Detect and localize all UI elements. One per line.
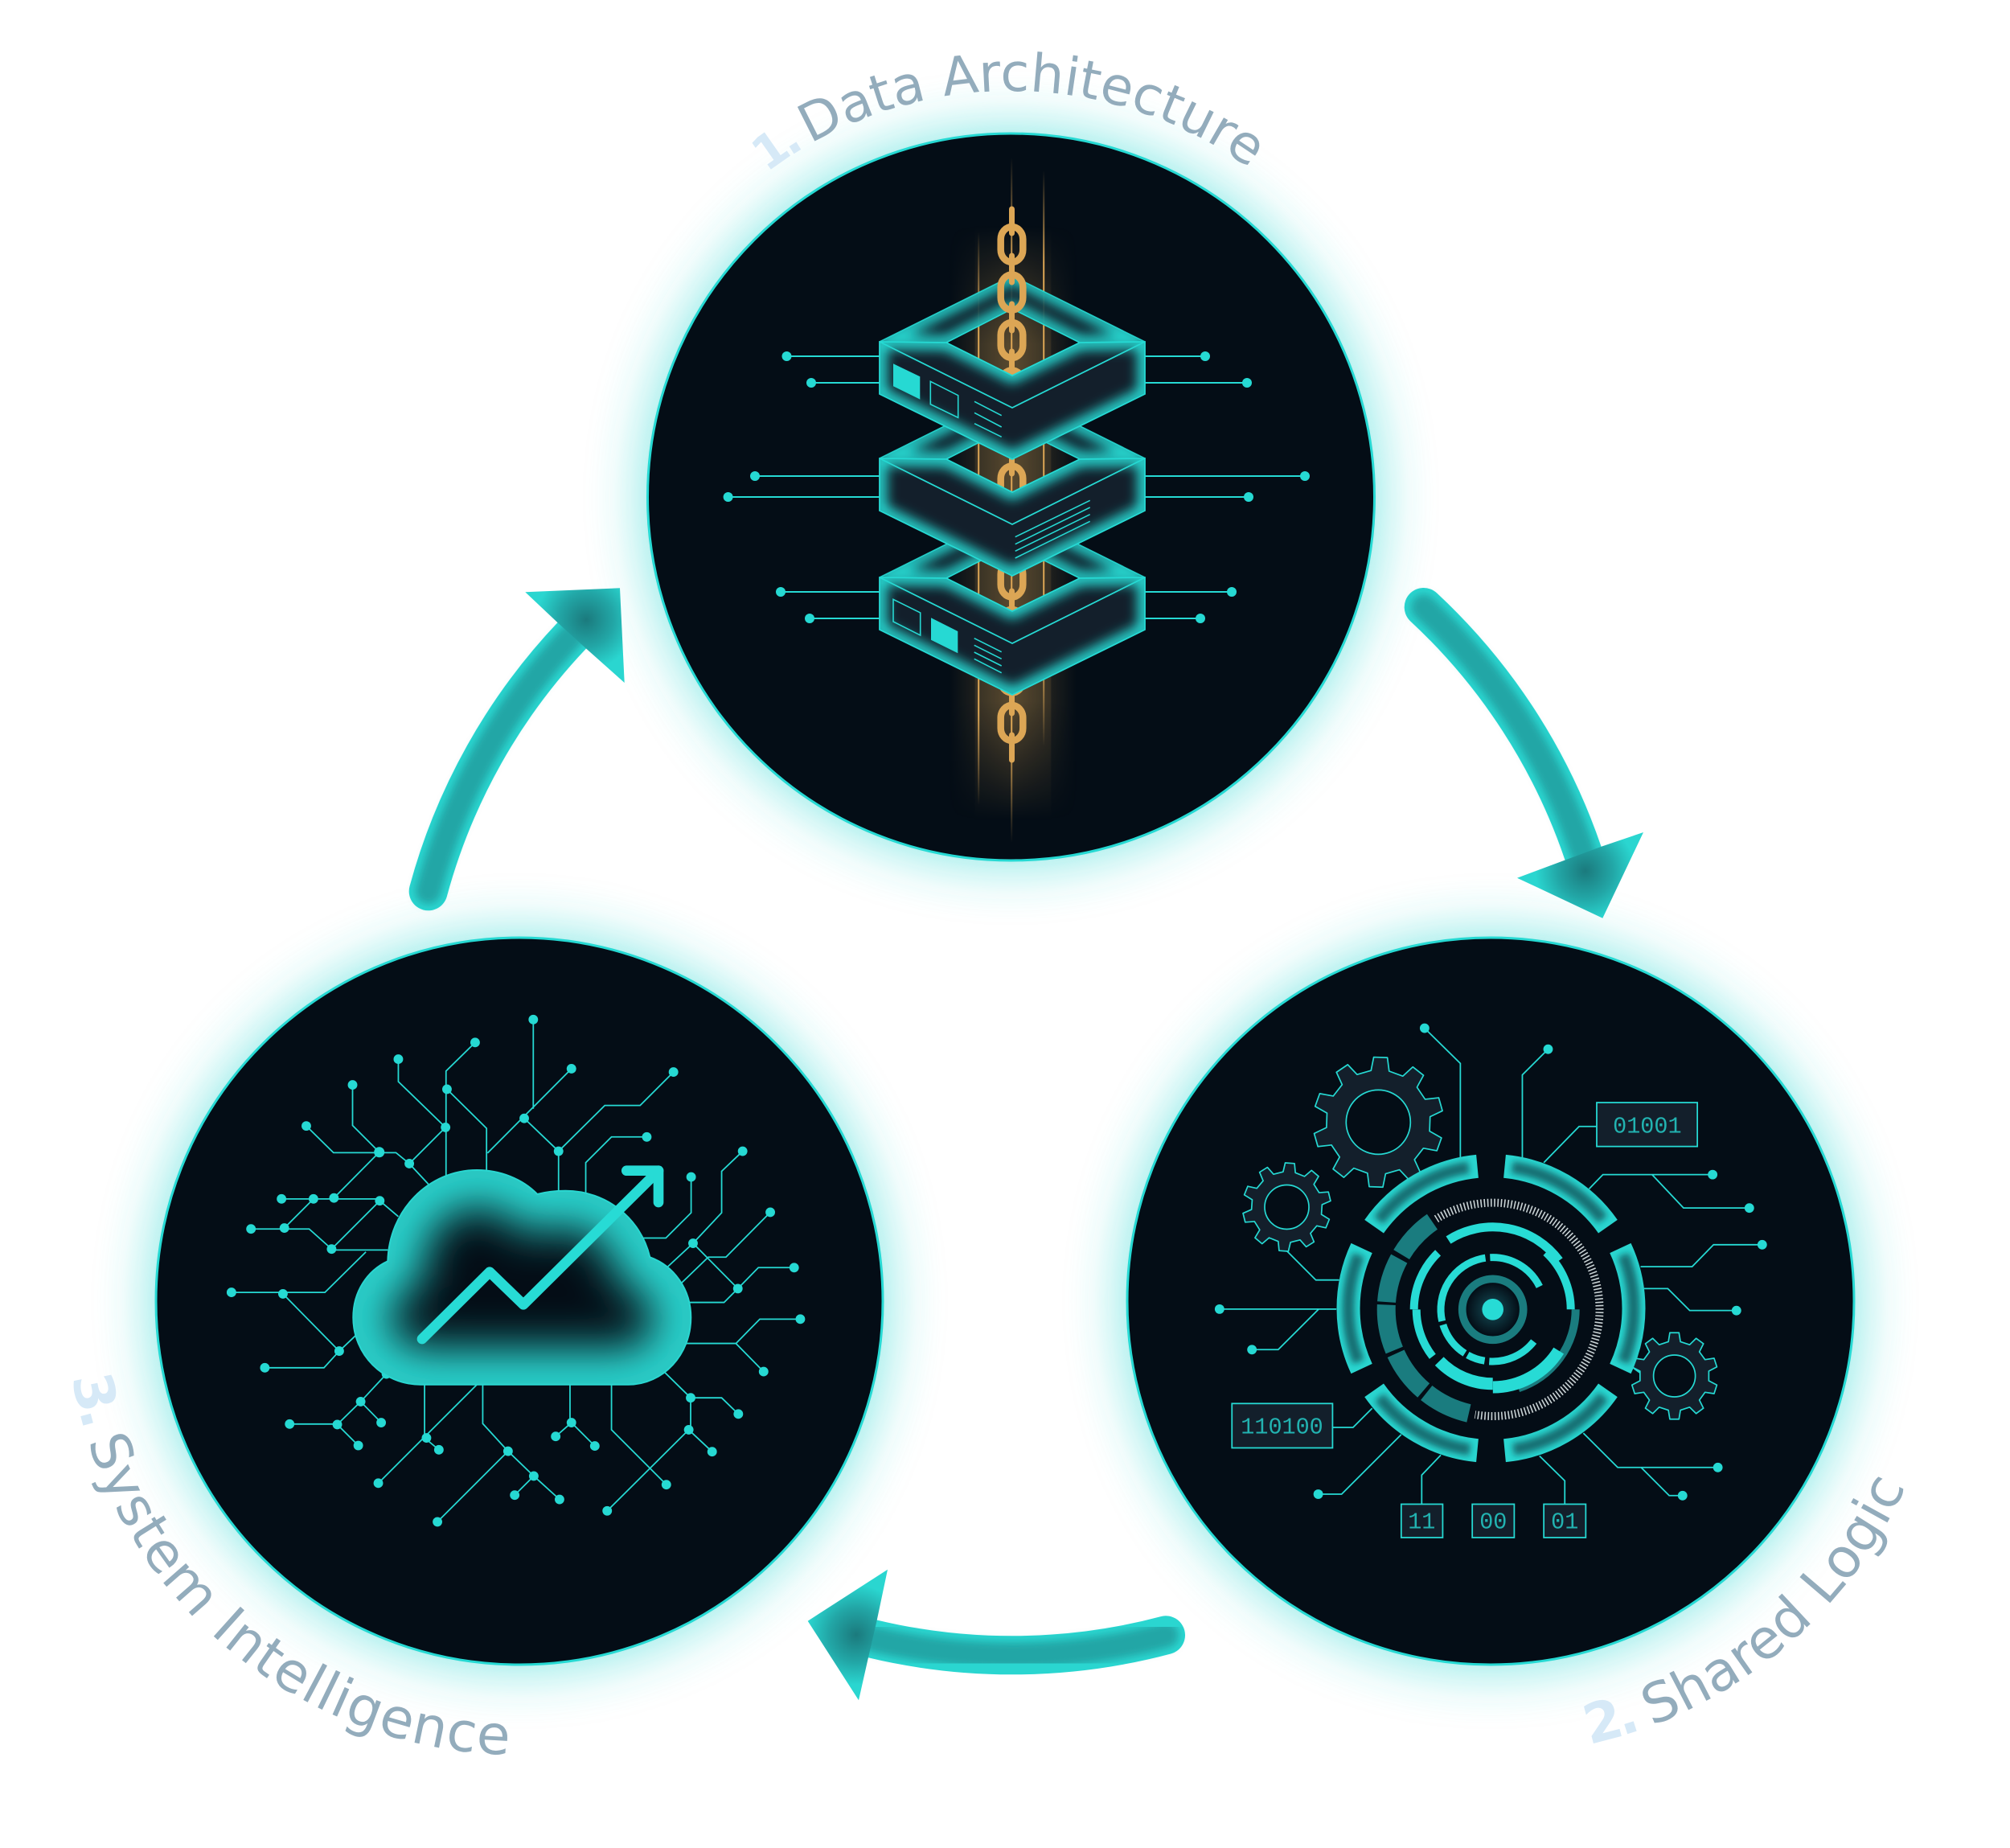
server connector lines (724, 351, 1310, 623)
gold chain (1001, 209, 1023, 760)
binary box 01: 01 (1551, 1509, 1578, 1536)
bright cyan ring segments (1379, 1196, 1606, 1423)
central hub dial (1290, 1108, 1692, 1509)
panel: data architecture circle (648, 133, 1375, 860)
orange glow band behind chain (958, 238, 1069, 807)
dark teal segments (1343, 1159, 1643, 1460)
orange vertical light lines (978, 158, 1044, 843)
hub core (1462, 1279, 1524, 1340)
label: 1. Data Architecture: 1. Data Architecture (753, 51, 1259, 169)
binary box 11 (1401, 1504, 1442, 1538)
arrow: system intelligence to data architecture (429, 588, 625, 891)
outer ring segments (1290, 1108, 1692, 1509)
panel: system intelligence circle (156, 938, 883, 1665)
binary box 110100 (1232, 1403, 1332, 1448)
circuit traces (1220, 1029, 1762, 1504)
glowing cloud (353, 1170, 691, 1385)
binary box 00 (1472, 1504, 1514, 1538)
circuit lines and binary boxes (1215, 1024, 1767, 1538)
gear large (1312, 1055, 1444, 1189)
server 1 (880, 342, 1145, 459)
binary box 110100: 110100 (1241, 1415, 1323, 1441)
growth arrow (422, 1171, 658, 1339)
server back rims (880, 276, 1145, 578)
tick ring (1436, 1203, 1600, 1416)
circuit end dots (1215, 1024, 1767, 1501)
network traces (232, 1020, 800, 1522)
arrow: shared logic to system intelligence (808, 1570, 1166, 1700)
network nodes (227, 1015, 805, 1526)
server 3 (880, 577, 1145, 695)
gear medium (1241, 1160, 1333, 1254)
server 2 (880, 458, 1145, 576)
label: 3. System Intelligence: 3. System Intelligence (74, 1375, 507, 1755)
binary box 11: 11 (1408, 1509, 1435, 1536)
binary box 01001 (1597, 1103, 1697, 1147)
panel: shared logic circle (1127, 938, 1854, 1665)
gear small (1632, 1333, 1717, 1419)
binary box 00: 00 (1479, 1509, 1507, 1536)
neural network tree (227, 1015, 805, 1526)
glow halos behind circles (156, 133, 1854, 1665)
label: 2. Shared Logic: 2. Shared Logic (1584, 1476, 1904, 1743)
binary box 01 (1544, 1504, 1585, 1538)
binary box 01001: 01001 (1613, 1113, 1682, 1140)
arrow: data architecture to shared logic (1424, 607, 1643, 918)
